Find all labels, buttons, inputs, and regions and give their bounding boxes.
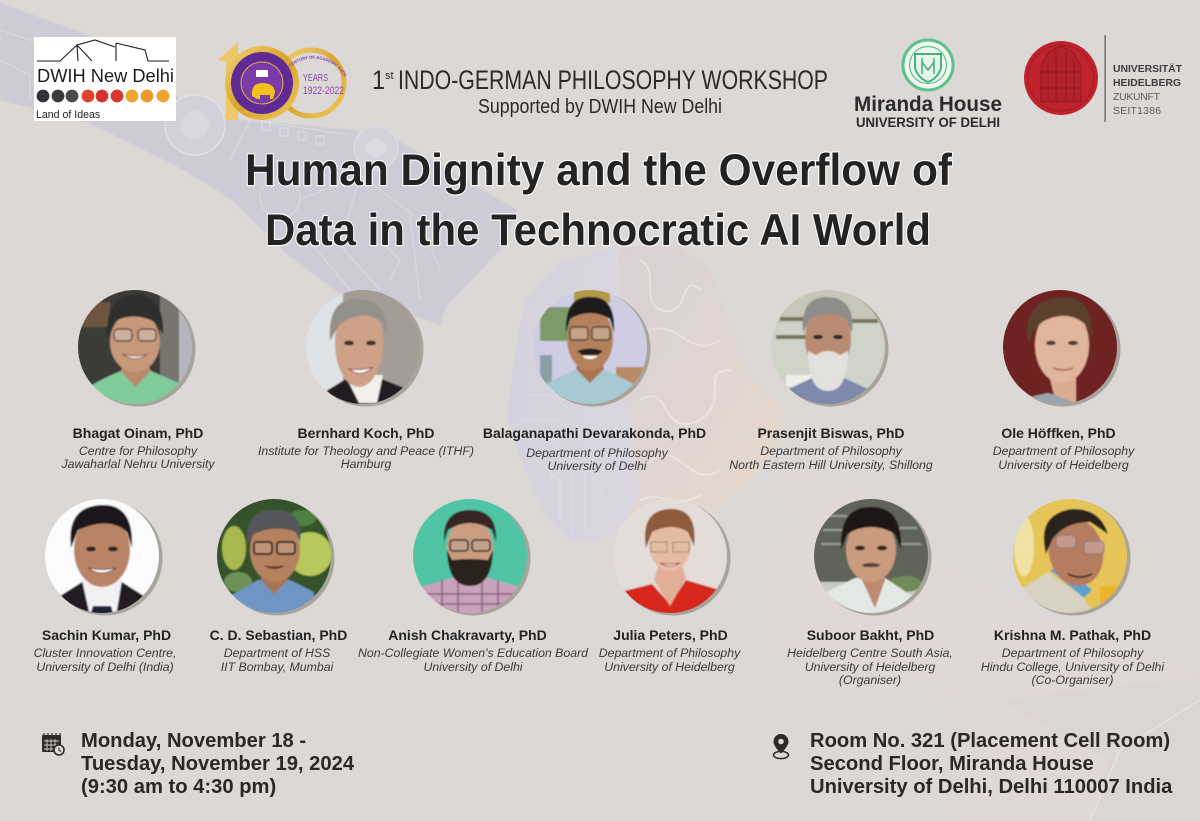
portrait: Krishna M. Pathak [1010,496,1130,616]
speaker: Ole Höffken [993,287,1135,472]
event venue [810,730,1173,798]
logo: Universität Heidelberg [1024,35,1183,122]
name and affiliation: Ole Höffken: Department of Philosophy [993,444,1135,458]
name and affiliation: Balaganapathi Devarakonda [483,425,706,473]
name and affiliation: Ole Höffken: Ole Höffken, PhD [1001,425,1116,441]
name and affiliation: Suboor Bakht: Heidelberg Centre South Asia, [787,646,953,660]
name and affiliation: Krishna M. Pathak: Department of Philosophy [1002,646,1144,660]
speaker: Bernhard Koch [258,287,474,471]
portrait: Julia Peters [624,500,730,616]
name and affiliation: C. D. Sebastian [210,627,347,674]
flowers row [37,90,169,102]
speaker: Balaganapathi Devarakonda [483,287,706,473]
name and affiliation: Julia Peters: University of Heidelberg [604,660,735,674]
name and affiliation: Suboor Bakht: (Organiser) [839,673,901,687]
portrait: Prasenjit Biswas [768,287,888,407]
name and affiliation: Krishna M. Pathak: Hindu College, University of Delhi [981,660,1165,674]
name and affiliation: Bernhard Koch [258,425,474,471]
name and affiliation: Bernhard Koch: Hamburg [341,457,391,471]
name and affiliation: Sachin Kumar: Sachin Kumar, PhD [42,627,171,643]
portrait: Suboor Bakht [811,496,932,616]
name and affiliation: Krishna M. Pathak [981,627,1165,687]
name and affiliation: Ole Höffken: University of Heidelberg [998,458,1129,472]
name and affiliation: Bhagat Oinam: Jawaharlal Nehru University [60,457,215,471]
logo: Miranda House [854,40,1002,130]
name and affiliation: Balaganapathi Devarakonda: Department of Philosophy [526,446,669,460]
logo: DWIH New Delhi: Land of Ideas [36,109,100,121]
name and affiliation: Suboor Bakht: Suboor Bakht, PhD [807,627,934,643]
portrait: Bernhard Koch [303,287,424,407]
speaker: Suboor Bakht [787,496,953,687]
name and affiliation: Anish Chakravarty: Non-Collegiate Women's Education Board [358,646,589,660]
name and affiliation: Bhagat Oinam: Centre for Philosophy [79,444,198,458]
title: Data in the Technocratic AI World [265,206,931,255]
speaker: C. D. Sebastian [210,496,347,674]
header: workshop name: 1 [372,65,385,95]
speaker: Bhagat Oinam [60,287,215,471]
name and affiliation: Prasenjit Biswas: North Eastern Hill University, Shillong [729,458,933,472]
event venue: Second Floor, Miranda House [810,753,1094,775]
name and affiliation: Suboor Bakht: University of Heidelberg [805,660,935,674]
header: workshop name [372,65,828,118]
logo: DWIH New Delhi [34,37,176,121]
speaker: Julia Peters [599,496,741,674]
name and affiliation: Prasenjit Biswas: Prasenjit Biswas, PhD [757,425,905,441]
name and affiliation: Sachin Kumar: University of Delhi (India) [36,660,174,674]
title: Human Dignity and the Overflow of [245,146,952,195]
name and affiliation: Julia Peters: Julia Peters, PhD [613,627,728,643]
name and affiliation: Sachin Kumar: Cluster Innovation Centre, [34,646,176,660]
portrait: Balaganapathi Devarakonda [530,287,650,407]
logo: DWIH New Delhi: DWIH New Delhi [37,65,174,86]
logo: University of Delhi centenary: 1922-2022 [303,85,344,97]
logo: Universität Heidelberg: UNIVERSITÄT [1113,62,1183,75]
event date and time: Tuesday, November 19, 2024 [81,753,355,775]
portrait: Anish Chakravarty [410,496,530,616]
portrait: Bhagat Oinam [75,287,196,407]
logo: Universität Heidelberg: SEIT1386 [1113,106,1161,117]
name and affiliation: Julia Peters: Department of Philosophy [599,646,741,660]
name and affiliation: Ole Höffken [993,425,1135,472]
event date and time: (9:30 am to 4:30 pm) [81,776,276,798]
portrait: Ole Höffken [1000,287,1120,407]
logo: University of Delhi centenary: YEARS [303,73,328,84]
name and affiliation: Krishna M. Pathak: Krishna M. Pathak, PhD [994,627,1151,643]
logo: Universität Heidelberg: HEIDELBERG [1113,78,1181,89]
logo: Universität Heidelberg: ZUKUNFT [1113,92,1161,103]
name and affiliation: Anish Chakravarty [358,627,589,674]
name and affiliation: Bernhard Koch: Bernhard Koch, PhD [298,425,434,441]
icon: calendar with clock [42,733,64,755]
name and affiliation: Julia Peters [599,627,741,674]
speaker: Anish Chakravarty [358,496,589,674]
event venue: University of Delhi, Delhi 110007 India [810,776,1173,798]
header: workshop name: st [385,70,394,82]
name and affiliation: Anish Chakravarty: University of Delhi [423,660,524,674]
name and affiliation: Krishna M. Pathak: (Co-Organiser) [1032,673,1114,687]
icon: location pin [774,734,788,759]
header: workshop name: Supported by DWIH New Delhi [478,96,722,118]
speaker: Prasenjit Biswas [729,287,933,472]
speaker: Sachin Kumar [34,496,176,674]
name and affiliation: Bhagat Oinam [60,425,215,471]
name and affiliation: Suboor Bakht [787,627,953,687]
name and affiliation: Bernhard Koch: Institute for Theology and Peace (ITHF) [258,444,474,458]
name and affiliation: Balaganapathi Devarakonda: Balaganapathi Devarakonda, PhD [483,425,706,441]
logo: Miranda House: Miranda House [854,92,1002,116]
portrait: Sachin Kumar [42,496,162,616]
name and affiliation: Balaganapathi Devarakonda: University of Delhi [547,459,648,473]
event date and time: Monday, November 18 - [81,730,306,752]
title [245,146,952,255]
portrait: C. D. Sebastian [214,496,334,616]
name and affiliation: C. D. Sebastian: Department of HSS [224,646,331,660]
header: workshop name: INDO-GERMAN PHILOSOPHY WORKSHOP [398,65,828,95]
name and affiliation: Bhagat Oinam: Bhagat Oinam, PhD [73,425,203,441]
background art: brain [507,246,783,540]
name and affiliation: Prasenjit Biswas [729,425,933,472]
background art: human arm [770,470,1200,821]
name and affiliation: Sachin Kumar [34,627,176,674]
name and affiliation: Prasenjit Biswas: Department of Philosophy [760,444,903,458]
background art: robot arm [0,3,518,325]
event venue: Room No. 321 (Placement Cell Room) [810,730,1170,752]
name and affiliation: Anish Chakravarty: Anish Chakravarty, PhD [388,627,547,643]
logo: Miranda House: UNIVERSITY OF DELHI [856,115,1000,130]
name and affiliation: C. D. Sebastian: C. D. Sebastian, PhD [210,627,347,643]
event date and time [81,730,355,798]
logo: University of Delhi centenary [218,42,347,120]
speaker: Krishna M. Pathak [981,496,1165,687]
name and affiliation: C. D. Sebastian: IIT Bombay, Mumbai [221,660,335,674]
